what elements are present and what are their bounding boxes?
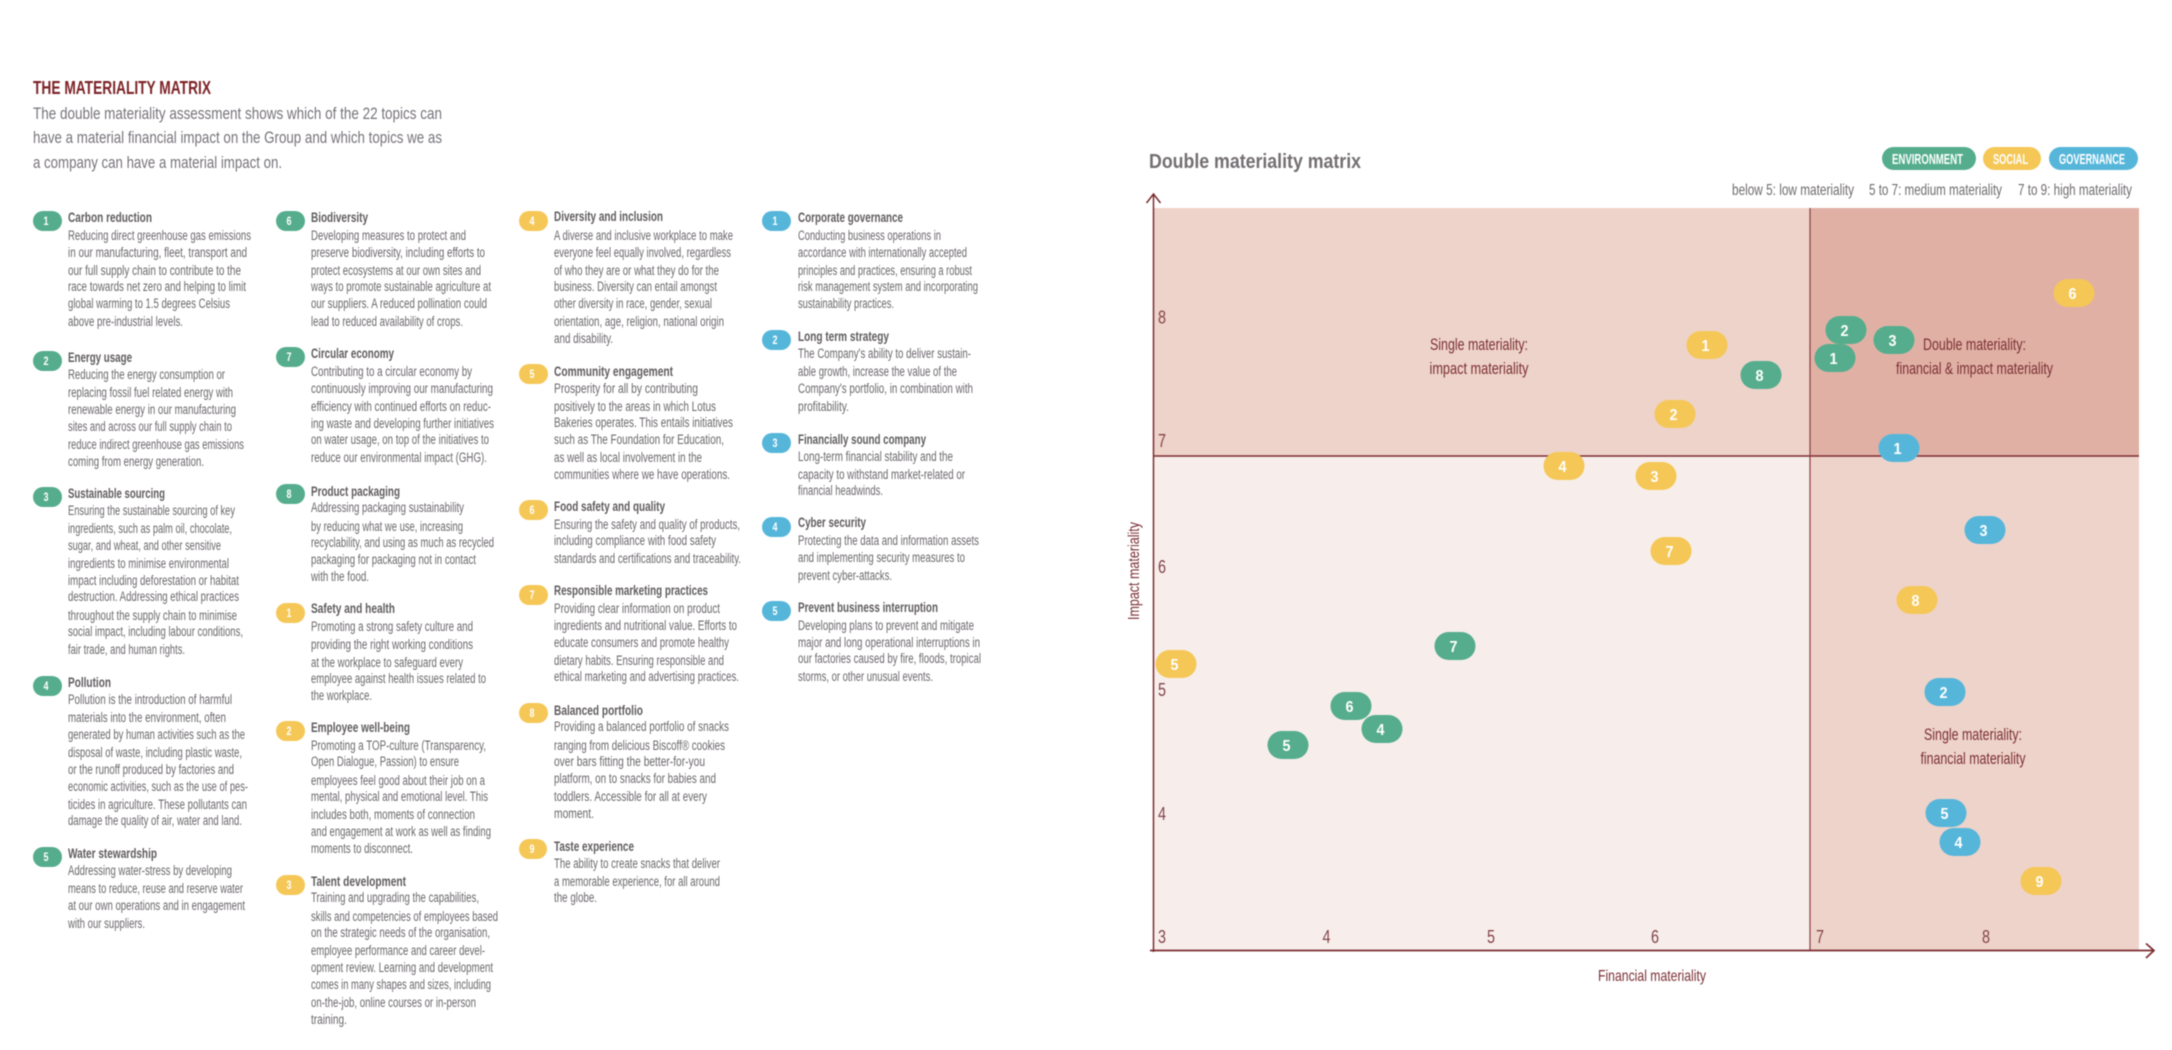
topic: employee well-being: and engagement at work as well as finding bbox=[311, 824, 491, 839]
topic: financially sound company: Financially sound company bbox=[798, 432, 926, 447]
point: governance 1 bbox=[1878, 434, 1920, 462]
topic: talent development: Talent development bbox=[311, 874, 406, 889]
point: environment 3: 3 bbox=[1888, 333, 1897, 350]
topic: taste experience: a memorable experience, for all around bbox=[554, 874, 720, 889]
topic: prevent business interruption bbox=[762, 600, 981, 684]
topic: product packaging: by reducing what we use, increasing bbox=[311, 519, 463, 534]
topic: diversity and inclusion: everyone feel equally involved, regardless bbox=[554, 245, 731, 260]
topic: circular economy bbox=[276, 346, 494, 465]
point: social 9: 9 bbox=[2036, 874, 2044, 891]
topic: safety and health: the workplace. bbox=[311, 688, 372, 703]
topic: talent development: on-the-job, online courses or in-person bbox=[311, 995, 476, 1010]
point: social 4 bbox=[1544, 452, 1584, 480]
legend: environment: ENVIRONMENT bbox=[1892, 151, 1963, 168]
point: governance 4: 4 bbox=[1954, 835, 1963, 852]
topic: circular economy: on water usage, on top of the initiatives to bbox=[311, 432, 489, 447]
y axis arrow bbox=[1146, 194, 1160, 952]
topic: food safety and quality: standards and certifications and traceability. bbox=[554, 551, 741, 566]
legend: social: SOCIAL bbox=[1993, 151, 2028, 168]
topic: prevent business interruption: storms, or other unusual events. bbox=[798, 669, 933, 684]
topic: employee well-being: Open Dialogue, Passion) to ensure bbox=[311, 754, 459, 769]
topic: financially sound company: financial headwinds. bbox=[798, 483, 883, 498]
topic: carbon reduction: Reducing direct greenhouse gas emissions bbox=[68, 228, 251, 243]
topic column: social 4 to 9 bbox=[519, 209, 741, 905]
topic column: environment 1 to 5 bbox=[33, 210, 251, 931]
topic: community engagement: such as The Foundation for Education, bbox=[554, 432, 724, 447]
topic: sustainable sourcing: ingredients, such as palm oil, chocolate, bbox=[68, 521, 232, 536]
matrix chart bbox=[1146, 194, 2154, 958]
point: environment 2: 2 bbox=[1840, 323, 1849, 340]
topic: product packaging: recyclability, and using as much as recycled bbox=[311, 535, 494, 550]
topic: safety and health: Promoting a strong safety culture and bbox=[311, 619, 473, 634]
topic: cyber security: prevent cyber-attacks. bbox=[798, 568, 892, 583]
topic: biodiversity: Biodiversity bbox=[311, 210, 368, 225]
topic: community engagement: Community engagement bbox=[554, 364, 673, 379]
topic: carbon reduction bbox=[33, 210, 251, 329]
intro text bbox=[33, 104, 442, 172]
point: social 1: 1 bbox=[1702, 338, 1710, 355]
intro text: The double materiality assessment shows which of the 22 topics can bbox=[33, 104, 442, 123]
topic: corporate governance: Conducting business operations in bbox=[798, 228, 941, 243]
topic: financially sound company: Long-term financial stability and the bbox=[798, 449, 953, 464]
quadrant label: single materiality impact: impact materiality bbox=[1430, 359, 1529, 378]
topic: water stewardship: Addressing water-stress by developing bbox=[68, 863, 232, 878]
topic: sustainable sourcing: 3 bbox=[44, 490, 49, 504]
point: governance 5 bbox=[1926, 799, 1966, 827]
topic: employee well-being: Promoting a TOP-culture (Transparency, bbox=[311, 738, 486, 753]
y axis tick labels: 4 bbox=[1158, 804, 1166, 824]
topic: diversity and inclusion: Diversity and inclusion bbox=[554, 209, 663, 224]
topic: talent development: skills and competencies of employees based bbox=[311, 909, 498, 924]
topic: pollution: ticides in agriculture. These pollutants can bbox=[68, 797, 247, 812]
point: environment 3 bbox=[1874, 326, 1914, 354]
topic: water stewardship: with our suppliers. bbox=[67, 916, 145, 931]
topic: energy usage: replacing fossil fuel related energy with bbox=[68, 385, 233, 400]
topic: balanced portfolio: Balanced portfolio bbox=[554, 703, 643, 718]
topic: prevent business interruption: 5 bbox=[772, 604, 778, 618]
topic: corporate governance: risk management system and incorporating bbox=[798, 279, 978, 294]
point: environment 5: 5 bbox=[1282, 738, 1291, 755]
point: environment 8: 8 bbox=[1756, 368, 1764, 385]
topic: energy usage bbox=[33, 350, 244, 469]
topic: energy usage: Reducing the energy consumption or bbox=[68, 367, 225, 382]
point: social 5 bbox=[1156, 650, 1196, 678]
topic: food safety and quality: 6 bbox=[530, 503, 535, 517]
point: social 5: 5 bbox=[1170, 657, 1179, 674]
x axis tick labels: 7 bbox=[1816, 927, 1824, 947]
topic: employee well-being: employees feel good about their job on a bbox=[311, 773, 485, 788]
x axis tick labels bbox=[1158, 927, 1990, 947]
topic: talent development: Training and upgrading the capabilities, bbox=[311, 890, 479, 905]
quadrant label: single materiality financial: Single materiality: bbox=[1924, 725, 2022, 744]
topic: food safety and quality bbox=[519, 499, 741, 566]
topic: corporate governance: accordance with internationally accepted bbox=[798, 245, 967, 260]
topic: energy usage: 2 bbox=[44, 354, 49, 368]
topic: community engagement: 5 bbox=[530, 367, 535, 381]
point: social 1 bbox=[1686, 331, 1728, 359]
quadrant: low materiality bbox=[1154, 456, 1810, 950]
topic: long term strategy: 2 bbox=[772, 333, 778, 347]
topic: biodiversity: 6 bbox=[286, 214, 292, 228]
topic: biodiversity: lead to reduced availability of crops. bbox=[311, 314, 463, 329]
point: social 7 bbox=[1650, 537, 1692, 565]
intro text: a company can have a material impact on. bbox=[33, 153, 282, 172]
topic: water stewardship: 5 bbox=[44, 850, 49, 864]
y axis tick labels: 7 bbox=[1158, 431, 1166, 451]
topic: food safety and quality: Ensuring the safety and quality of products, bbox=[554, 517, 740, 532]
topic: sustainable sourcing: destruction. Addressing ethical practices bbox=[68, 589, 239, 604]
topic: corporate governance bbox=[762, 210, 978, 311]
topic: long term strategy bbox=[762, 329, 973, 414]
topic: safety and health: Safety and health bbox=[311, 601, 395, 616]
topic: balanced portfolio: 8 bbox=[530, 706, 535, 720]
topic: carbon reduction: race towards net zero and helping to limit bbox=[68, 279, 246, 294]
topic: long term strategy: The Company's ability to deliver sustain- bbox=[798, 346, 971, 361]
topic: community engagement: positively to the areas in which Lotus bbox=[554, 399, 716, 414]
topic: talent development: training. bbox=[311, 1012, 347, 1027]
intro text: have a material financial impact on the Group and which topics we as bbox=[33, 128, 442, 147]
topic: circular economy: continuously improving our manufacturing bbox=[311, 381, 493, 396]
topic: sustainable sourcing: sugar, and wheat, and other sensitive bbox=[68, 538, 221, 553]
topic: product packaging bbox=[276, 484, 494, 584]
topic: product packaging: 8 bbox=[286, 487, 292, 501]
topic: pollution: damage the quality of air, water and land. bbox=[68, 813, 242, 828]
y axis tick labels bbox=[1158, 308, 1166, 824]
topic column: environment 6 to 8, social 1 to 3 bbox=[276, 210, 498, 1027]
point: environment 8 bbox=[1740, 361, 1782, 389]
topic: biodiversity: Developing measures to protect and bbox=[311, 228, 466, 243]
topic: water stewardship: Water stewardship bbox=[68, 846, 157, 861]
topic: employee well-being: Employee well-being bbox=[311, 720, 410, 735]
point: governance 5: 5 bbox=[1940, 806, 1949, 823]
topic: energy usage: coming from energy generation. bbox=[68, 454, 204, 469]
topic: long term strategy: Long term strategy bbox=[798, 329, 889, 344]
topic: diversity and inclusion: orientation, age, religion, national origin bbox=[554, 314, 724, 329]
y axis tick labels: 5 bbox=[1158, 680, 1166, 700]
topic: energy usage: renewable energy in our manufacturing bbox=[68, 402, 236, 417]
topic column: governance 1 to 5 bbox=[762, 210, 981, 684]
point: social 9 bbox=[2020, 867, 2062, 895]
topic: employee well-being: 2 bbox=[286, 724, 292, 738]
x axis tick labels: 8 bbox=[1982, 927, 1990, 947]
topic: taste experience: The ability to create snacks that deliver bbox=[554, 856, 720, 871]
topic: cyber security: Cyber security bbox=[798, 515, 866, 530]
topic: balanced portfolio: platform, on to snacks for babies and bbox=[554, 771, 716, 786]
topic: balanced portfolio: moment. bbox=[554, 806, 594, 821]
quadrant label: double materiality: Double materiality: bbox=[1923, 335, 2026, 354]
topic: biodiversity: our suppliers. A reduced pollination could bbox=[311, 296, 487, 311]
x axis arrow bbox=[1150, 944, 2154, 958]
topic: carbon reduction: Carbon reduction bbox=[68, 210, 152, 225]
topic: cyber security: 4 bbox=[772, 520, 778, 534]
point: environment 6 bbox=[1330, 692, 1372, 720]
x axis title: Financial materiality bbox=[1598, 968, 1706, 985]
topic: corporate governance: 1 bbox=[772, 214, 778, 228]
topic: responsible marketing practices: dietary habits. Ensuring responsible and bbox=[554, 653, 724, 668]
topic: talent development bbox=[276, 874, 498, 1027]
topic: balanced portfolio: Providing a balanced portfolio of snacks bbox=[554, 719, 729, 734]
topic: prevent business interruption: Developing plans to prevent and mitigate bbox=[798, 618, 974, 633]
topic: sustainable sourcing: throughout the supply chain to minimise bbox=[68, 608, 237, 623]
topic: community engagement bbox=[519, 364, 733, 482]
topic: pollution: materials into the environment, often bbox=[68, 710, 226, 725]
topic: diversity and inclusion bbox=[519, 209, 733, 346]
topic: cyber security bbox=[762, 515, 979, 583]
quadrant label: double materiality: financial & impact materiality bbox=[1896, 359, 2053, 378]
topic: community engagement: as well as local involvement in the bbox=[554, 450, 702, 465]
point: governance 4 bbox=[1940, 828, 1980, 856]
quadrant label: single materiality financial bbox=[1920, 725, 2026, 768]
topic: food safety and quality: Food safety and quality bbox=[554, 499, 665, 514]
topic: taste experience: the globe. bbox=[554, 890, 597, 905]
point: governance 3: 3 bbox=[1980, 523, 1988, 540]
chart heading: Double materiality matrix bbox=[1149, 151, 1361, 173]
topic: sustainable sourcing: impact including deforestation or habitat bbox=[68, 573, 239, 588]
materiality thresholds bbox=[1732, 182, 2132, 199]
topic: long term strategy: Company's portfolio, in combination with bbox=[798, 381, 973, 396]
topic: circular economy: 7 bbox=[286, 350, 292, 364]
topic: talent development: on the strategic needs of the organisation, bbox=[311, 925, 490, 940]
point: social 6 bbox=[2054, 279, 2094, 307]
y axis tick labels: 8 bbox=[1158, 308, 1166, 328]
legend bbox=[1882, 147, 2138, 170]
topic: energy usage: reduce indirect greenhouse gas emissions bbox=[68, 437, 244, 452]
x axis tick labels: 5 bbox=[1487, 927, 1495, 947]
topic: food safety and quality: including compliance with food safety bbox=[554, 533, 716, 548]
topic: taste experience: 9 bbox=[530, 842, 535, 856]
materiality thresholds: 7 to 9: high materiality bbox=[2018, 182, 2132, 199]
topic: long term strategy: profitability. bbox=[798, 399, 849, 414]
topic: responsible marketing practices: educate consumers and promote healthy bbox=[554, 635, 729, 650]
topic: carbon reduction: above pre-industrial levels. bbox=[68, 314, 183, 329]
topic: sustainable sourcing: social impact, including labour conditions, bbox=[68, 624, 243, 639]
topic: biodiversity bbox=[276, 210, 491, 329]
topic: talent development: employee performance and career devel- bbox=[311, 943, 485, 958]
point: governance 2 bbox=[1924, 678, 1966, 706]
topic: pollution bbox=[33, 675, 248, 828]
topic: circular economy: Contributing to a circular economy by bbox=[311, 364, 472, 379]
quadrant label: single materiality financial: financial materiality bbox=[1920, 749, 2026, 768]
topic: responsible marketing practices: ethical marketing and advertising practices. bbox=[554, 669, 739, 684]
legend: governance: GOVERNANCE bbox=[2059, 151, 2125, 168]
topic: financially sound company bbox=[762, 432, 965, 498]
topic: corporate governance: principles and practices, ensuring a robust bbox=[798, 263, 972, 278]
x axis tick labels: 6 bbox=[1651, 927, 1659, 947]
topic: balanced portfolio: toddlers. Accessible for all at every bbox=[554, 789, 707, 804]
topic: employee well-being: mental, physical and emotional level. This bbox=[311, 789, 488, 804]
topic: safety and health: employee against health issues related to bbox=[311, 671, 486, 686]
point: social 6: 6 bbox=[2068, 286, 2077, 303]
topic: prevent business interruption: Prevent business interruption bbox=[798, 600, 938, 615]
topic: financially sound company: capacity to withstand market-related or bbox=[798, 467, 965, 482]
point: governance 2: 2 bbox=[1940, 685, 1948, 702]
topic: pollution: Pollution is the introduction of harmful bbox=[68, 692, 232, 707]
topic: sustainable sourcing: Ensuring the sustainable sourcing of key bbox=[68, 503, 235, 518]
x axis tick labels: 4 bbox=[1322, 927, 1330, 947]
topic: sustainable sourcing: fair trade, and human rights. bbox=[68, 642, 185, 657]
topic: carbon reduction: our full supply chain to contribute to the bbox=[68, 263, 241, 278]
topic: safety and health: 1 bbox=[286, 606, 292, 620]
point: environment 1: 1 bbox=[1830, 351, 1838, 368]
topic: sustainable sourcing: ingredients to minimise environmental bbox=[68, 556, 229, 571]
point: social 2 bbox=[1654, 400, 1696, 428]
topic: cyber security: and implementing security measures to bbox=[798, 550, 965, 565]
point: governance 1: 1 bbox=[1894, 441, 1902, 458]
topic: carbon reduction: in our manufacturing, fleet, transport and bbox=[68, 245, 247, 260]
topic: balanced portfolio bbox=[519, 703, 729, 821]
topic: corporate governance: sustainability practices. bbox=[798, 296, 894, 311]
topic: financially sound company: 3 bbox=[772, 436, 778, 450]
topic: long term strategy: able growth, increase the value of the bbox=[798, 364, 957, 379]
topic: energy usage: sites and across our full supply chain to bbox=[68, 419, 232, 434]
topic: product packaging: Product packaging bbox=[311, 484, 400, 499]
topic: carbon reduction: 1 bbox=[44, 214, 49, 228]
topic: community engagement: communities where we have operations. bbox=[554, 467, 730, 482]
topic: product packaging: Addressing packaging sustainability bbox=[311, 500, 464, 515]
topic: balanced portfolio: over bars fitting the better-for-you bbox=[554, 754, 705, 769]
topic: balanced portfolio: ranging from delicious Biscoff® cookies bbox=[554, 738, 725, 753]
legend: environment bbox=[1882, 147, 1976, 170]
topic: corporate governance: Corporate governance bbox=[798, 210, 903, 225]
topic: water stewardship: means to reduce, reuse and reserve water bbox=[68, 881, 243, 896]
topic: prevent business interruption: our factories caused by fire, floods, tropical bbox=[798, 651, 981, 666]
topic: taste experience: Taste experience bbox=[554, 839, 634, 854]
topic: biodiversity: protect ecosystems at our own sites and bbox=[311, 263, 481, 278]
topic: water stewardship: at our own operations and in engagement bbox=[68, 898, 245, 913]
x axis tick labels: 3 bbox=[1158, 927, 1166, 947]
topic: diversity and inclusion: of who they are or what they do for the bbox=[554, 263, 719, 278]
topic: carbon reduction: global warming to 1.5 degrees Celsius bbox=[68, 296, 230, 311]
topic: diversity and inclusion: business. Diversity can entail amongst bbox=[554, 279, 717, 294]
topic: biodiversity: preserve biodiversity, including efforts to bbox=[311, 245, 485, 260]
point: environment 6: 6 bbox=[1346, 699, 1354, 716]
topic: safety and health: providing the right working conditions bbox=[311, 637, 473, 652]
topic: talent development: comes in many shapes and sizes, including bbox=[311, 977, 491, 992]
point: environment 1 bbox=[1814, 344, 1856, 372]
topic: community engagement: Bakeries operates. This entails initiatives bbox=[554, 415, 733, 430]
topic: biodiversity: ways to promote sustainable agriculture at bbox=[310, 279, 491, 294]
point: social 3 bbox=[1636, 462, 1676, 490]
quadrant: single materiality, impact bbox=[1154, 208, 1810, 456]
materiality thresholds: below 5: low materiality bbox=[1732, 182, 1854, 199]
topic: pollution: 4 bbox=[44, 679, 49, 693]
topic: pollution: disposal of waste, including plastic waste, bbox=[68, 745, 242, 760]
topic: sustainable sourcing: Sustainable sourcing bbox=[68, 486, 165, 501]
point: environment 7 bbox=[1434, 632, 1476, 660]
topic: responsible marketing practices: ingredients and nutritional value. Efforts to bbox=[554, 618, 737, 633]
materiality thresholds: 5 to 7: medium materiality bbox=[1869, 182, 2002, 199]
topic: circular economy: reduce our environmental impact (GHG). bbox=[311, 450, 487, 465]
data points bbox=[1156, 279, 2094, 895]
point: social 8 bbox=[1896, 586, 1938, 614]
y axis tick labels: 6 bbox=[1158, 557, 1166, 577]
topic: responsible marketing practices: 7 bbox=[530, 588, 535, 602]
topic: pollution: economic activities, such as the use of pes- bbox=[68, 779, 248, 794]
topic: responsible marketing practices: Responsible marketing practices bbox=[554, 583, 708, 598]
topic: talent development: 3 bbox=[286, 878, 292, 892]
topic: pollution: Pollution bbox=[68, 675, 111, 690]
topic: employee well-being: includes both, moments of connection bbox=[311, 807, 475, 822]
legend: social bbox=[1983, 147, 2041, 170]
topic: product packaging: with the food. bbox=[310, 569, 369, 584]
point: social 8: 8 bbox=[1912, 593, 1920, 610]
topic: pollution: generated by human activities such as the bbox=[68, 727, 245, 742]
point: environment 4 bbox=[1362, 715, 1402, 743]
topic: diversity and inclusion: 4 bbox=[530, 214, 535, 228]
topic: community engagement: Prosperity for all by contributing bbox=[554, 381, 698, 396]
topic: talent development: opment review. Learning and development bbox=[311, 960, 493, 975]
topic: energy usage: Energy usage bbox=[68, 350, 132, 365]
point: social 4: 4 bbox=[1558, 459, 1567, 476]
point: social 7: 7 bbox=[1666, 544, 1674, 561]
topic: employee well-being bbox=[276, 720, 491, 856]
topic: responsible marketing practices: Providing clear information on product bbox=[554, 601, 720, 616]
topic: prevent business interruption: major and long operational interruptions in bbox=[798, 635, 980, 650]
topic: employee well-being: moments to disconnect. bbox=[311, 841, 413, 856]
topic: pollution: or the runoff produced by factories and bbox=[68, 762, 234, 777]
point: social 3: 3 bbox=[1650, 469, 1659, 486]
quadrant label: single materiality impact bbox=[1430, 335, 1529, 378]
topic: water stewardship bbox=[33, 846, 245, 931]
topic: cyber security: Protecting the data and information assets bbox=[798, 533, 979, 548]
point: social 2: 2 bbox=[1670, 407, 1678, 424]
topic: responsible marketing practices bbox=[519, 583, 739, 684]
quadrant label: single materiality impact: Single materiality: bbox=[1430, 335, 1528, 354]
topic: diversity and inclusion: A diverse and inclusive workplace to make bbox=[554, 228, 733, 243]
quadrant: double materiality bbox=[1810, 208, 2139, 456]
quadrant: single materiality, financial bbox=[1810, 456, 2139, 950]
topic: circular economy: ing waste and developing further initiatives bbox=[311, 416, 494, 431]
topic: safety and health: at the workplace to safeguard every bbox=[311, 655, 463, 670]
topic: circular economy: Circular economy bbox=[311, 346, 394, 361]
point: environment 4: 4 bbox=[1376, 722, 1385, 739]
point: environment 2 bbox=[1826, 316, 1866, 344]
y axis title: Impact materiality bbox=[1126, 522, 1143, 620]
topic: taste experience bbox=[519, 839, 720, 905]
topic: diversity and inclusion: other diversity in race, gender, sexual bbox=[554, 296, 712, 311]
point: governance 3 bbox=[1964, 516, 2006, 544]
point: environment 7: 7 bbox=[1450, 639, 1458, 656]
topic: diversity and inclusion: and disability. bbox=[554, 331, 613, 346]
legend: governance bbox=[2049, 147, 2138, 170]
quadrant label: double materiality bbox=[1896, 335, 2053, 378]
topic: safety and health bbox=[276, 601, 486, 703]
topic: circular economy: efficiency with continued efforts on reduc- bbox=[311, 399, 491, 414]
topic: product packaging: packaging for packaging not in contact bbox=[311, 552, 476, 567]
topic: sustainable sourcing bbox=[33, 486, 243, 657]
point: environment 5 bbox=[1268, 731, 1308, 759]
title: THE MATERIALITY MATRIX bbox=[33, 78, 211, 98]
